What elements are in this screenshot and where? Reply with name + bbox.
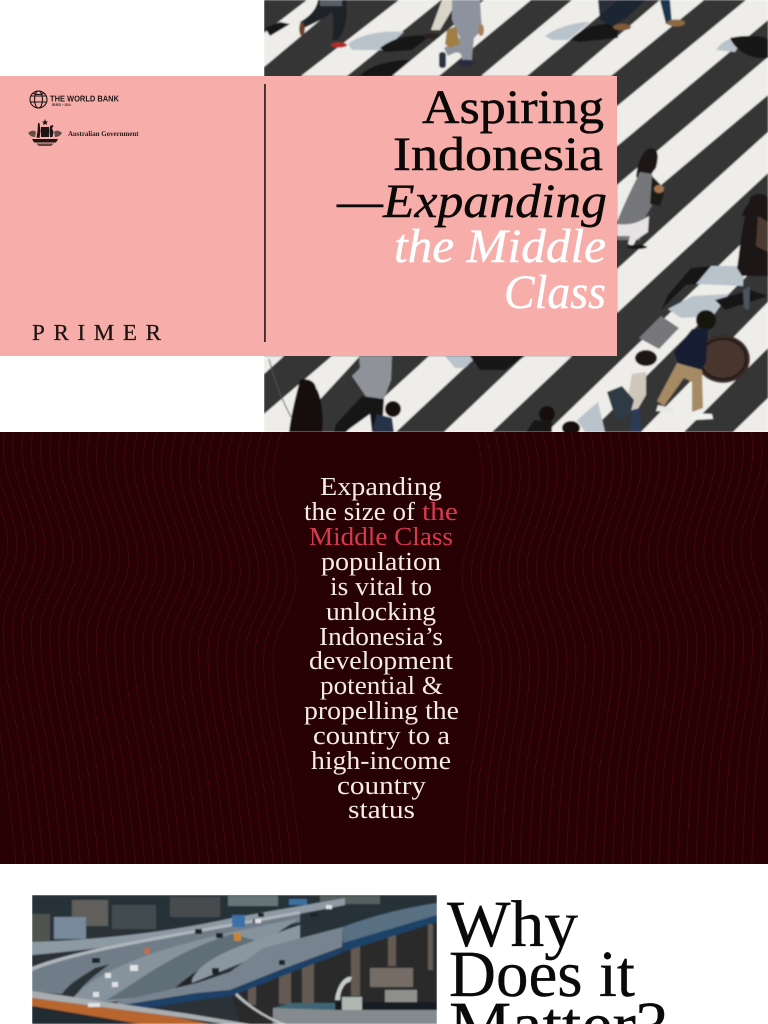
panel: pink title block: [0, 76, 617, 356]
woman in grey coat: [617, 148, 664, 249]
pedestrian top right: [598, 0, 685, 30]
main flyover deck: [117, 927, 343, 1006]
woman with patterned blouse and bag: [607, 350, 657, 432]
shadows: [348, 22, 745, 432]
logo: The World Bank: [30, 91, 120, 108]
child: [372, 401, 401, 432]
low buildings at right: [370, 968, 413, 987]
dark verge beside left roadway: [62, 964, 110, 996]
patch of worn asphalt: [639, 316, 679, 349]
manhole cover: [696, 335, 750, 383]
logo: Australian Government: [28, 119, 139, 146]
pedestrian top left: [299, 0, 347, 48]
main left roadway: [32, 912, 300, 994]
statement text: the: [422, 497, 458, 526]
statement text: Middle Class: [309, 522, 453, 551]
upper ramp: [32, 898, 345, 955]
man in grey shirt, bottom left: [334, 356, 392, 432]
vertical divider rule: [264, 84, 266, 342]
label: PRIMER: PRIMER: [32, 320, 162, 345]
statement text: Indonesia’s: [319, 622, 443, 651]
title: Indonesia: [393, 128, 603, 181]
statement text: country: [337, 771, 426, 800]
photo: highway interchange: [32, 895, 437, 1024]
logo: The World Bank: THE WORLD BANK: [50, 94, 120, 104]
statement text: country to a: [313, 721, 451, 750]
pedestrian top centre with bag: [424, 0, 484, 68]
cars: [92, 913, 318, 974]
statement text: [304, 472, 459, 824]
foreground orange overpass: [32, 1008, 124, 1024]
pedestrian in black, bottom left: [269, 359, 323, 432]
statement text: propelling the: [304, 696, 459, 725]
road signs: [232, 915, 245, 927]
title: —Expanding: [336, 175, 607, 228]
curved ramp kerb: [235, 993, 287, 1024]
photo: pedestrians on a zebra crossing: [264, 0, 768, 435]
secondary ramp: [192, 925, 300, 983]
city buildings: [32, 895, 437, 929]
man in navy shirt walking: [656, 310, 716, 420]
heading: Why Does it Matter?: Does it: [449, 938, 635, 1011]
logo: The World Bank: IBRD • IDA: [52, 103, 71, 107]
panel: dark statement band: [0, 432, 768, 864]
logo: Australian Government: Australian Government: [68, 129, 139, 138]
pedestrians at bottom edge: [526, 406, 580, 435]
statement text: potential &: [320, 671, 443, 700]
statement text: is vital to: [330, 572, 432, 601]
central ramp with cones and cars: [73, 918, 300, 1002]
statement text: high-income: [311, 746, 451, 775]
title: Aspiring: [422, 81, 604, 134]
statement text: the size of: [304, 497, 415, 526]
title: Class: [504, 266, 606, 319]
statement text: population: [321, 547, 441, 576]
heading: Why Does it Matter?: Why: [447, 888, 578, 961]
dark interior between ramps: [177, 972, 220, 987]
statement text: status: [348, 795, 415, 824]
structure under flyover: [230, 922, 437, 1024]
statement text: unlocking: [326, 597, 436, 626]
statement text: Expanding: [320, 472, 442, 501]
person with luggage at right edge: [737, 194, 768, 310]
title: the Middle: [394, 220, 606, 273]
title: [336, 81, 607, 319]
heading: Why Does it Matter?: [447, 888, 667, 1024]
statement text: development: [309, 646, 454, 675]
